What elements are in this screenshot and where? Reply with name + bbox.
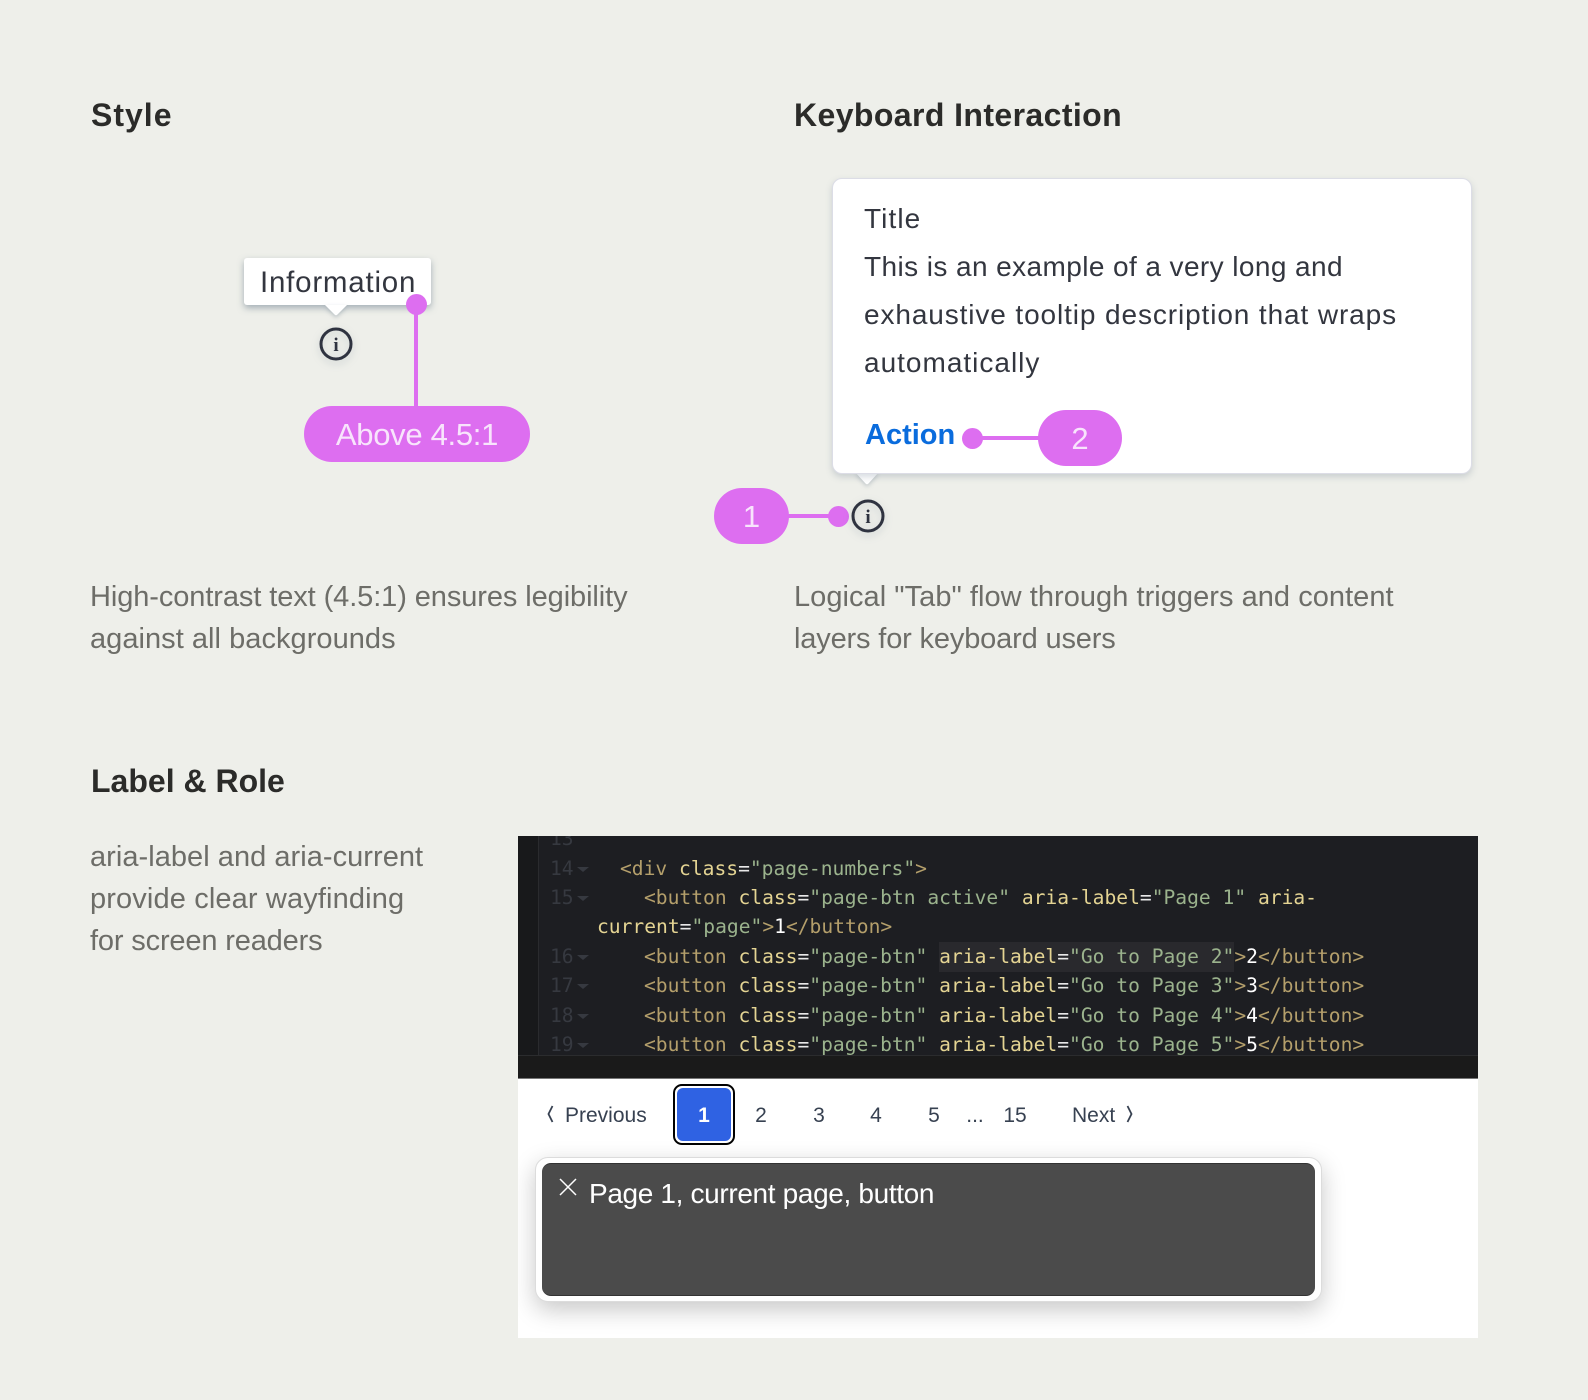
- code editor: [518, 836, 1478, 1055]
- code lines: <div class="page-numbers">: [620, 857, 927, 880]
- ellipsis: ...: [966, 1104, 984, 1127]
- connector dot: [406, 294, 426, 314]
- text: style description: [90, 581, 628, 655]
- tooltip label: Information: [260, 266, 416, 299]
- icon: info: [850, 500, 886, 537]
- text: keyboard description: layers for keyboard users: [794, 623, 1116, 655]
- text: label description: aria-label and aria-current: [90, 841, 423, 873]
- line numbers: 18: [550, 1004, 574, 1027]
- page 5: 5: [928, 1104, 940, 1127]
- editor status bar: [518, 1055, 1478, 1079]
- line highlight: [939, 942, 1234, 972]
- icon: close: [560, 1178, 576, 1196]
- screen reader announcement: [535, 1157, 1322, 1302]
- text: label description: provide clear wayfinding: [90, 883, 404, 915]
- callout: 1: [714, 488, 789, 544]
- next label: Next: [1072, 1104, 1115, 1127]
- callout: above 4.5:1: Above 4.5:1: [336, 417, 498, 452]
- connector: trigger: [785, 514, 835, 518]
- text: keyboard description: [794, 581, 1394, 655]
- tooltip description: This is an example of a very long and: [864, 251, 1343, 282]
- line numbers: 17: [550, 974, 574, 997]
- icon: info: [318, 328, 354, 365]
- page 3: 3: [813, 1104, 825, 1127]
- icon: info: i: [865, 507, 871, 528]
- tooltip description: automatically: [864, 347, 1040, 378]
- callout: above 4.5:1: [304, 406, 530, 462]
- code lines: [597, 857, 1364, 1055]
- panel: label and role: [90, 763, 1478, 1338]
- pagination: [548, 1084, 1132, 1145]
- page 4: 4: [870, 1104, 882, 1127]
- text: keyboard description: Logical "Tab" flow through triggers and content: [794, 581, 1394, 613]
- code lines: <button class="page-btn" aria-label="Go to Page 3">3</button>: [644, 974, 1364, 997]
- current page button: [673, 1084, 735, 1145]
- page 15: 15: [1003, 1104, 1027, 1127]
- callout: 2: [1038, 410, 1122, 466]
- text: label description: [90, 841, 423, 957]
- screenshot: code and pagination: [518, 836, 1478, 1338]
- current page button: 1: [698, 1104, 710, 1127]
- tooltip action link: Action: [865, 419, 955, 451]
- announcement text: Page 1, current page, button: [589, 1178, 934, 1209]
- icon: previous chevron: [548, 1106, 554, 1122]
- text: style description: High-contrast text (4.5:1) ensures legibility: [90, 581, 628, 613]
- announcement panel: [542, 1163, 1315, 1296]
- line numbers: 14: [550, 857, 574, 880]
- callout: 1: 1: [743, 499, 760, 534]
- line numbers: 16: [550, 945, 574, 968]
- line numbers: [550, 836, 589, 1055]
- text: label description: for screen readers: [90, 925, 322, 957]
- heading: label and role: Label & Role: [91, 763, 285, 799]
- heading: style: Style: [91, 97, 172, 133]
- page 2: 2: [755, 1104, 767, 1127]
- callout: 2: 2: [1071, 421, 1089, 456]
- tooltip title: Title: [864, 203, 921, 234]
- line numbers: 15: [550, 886, 574, 909]
- heading: keyboard interaction: Keyboard Interaction: [794, 97, 1122, 133]
- icon: next chevron: [1126, 1106, 1132, 1122]
- tooltip description: [864, 251, 1397, 378]
- previous label: Previous: [565, 1104, 647, 1127]
- code lines: <button class="page-btn" aria-label="Go to Page 4">4</button>: [644, 1004, 1364, 1027]
- tooltip card: [832, 178, 1472, 474]
- connector: contrast callout: [414, 310, 418, 410]
- icon: info: i: [333, 335, 339, 356]
- connector dot: [828, 506, 848, 526]
- connector: action: [972, 436, 1042, 440]
- editor gutter: [518, 836, 539, 1055]
- tooltip pointer: [856, 474, 878, 488]
- tooltip pointer: [325, 304, 347, 319]
- code lines: <button class="page-btn" aria-label="Go to Page 2">2</button>: [644, 945, 1364, 968]
- text: style description: against all backgrounds: [90, 623, 396, 655]
- panel: style: [90, 97, 628, 655]
- code lines: current="page">1</button>: [597, 915, 892, 938]
- code lines: <button class="page-btn active" aria-label="Page 1" aria-: [644, 886, 1317, 909]
- tooltip description: exhaustive tooltip description that wraps: [864, 299, 1397, 330]
- tooltip: information: [244, 258, 431, 305]
- connector dot: [962, 428, 983, 448]
- panel: keyboard interaction: [714, 97, 1475, 655]
